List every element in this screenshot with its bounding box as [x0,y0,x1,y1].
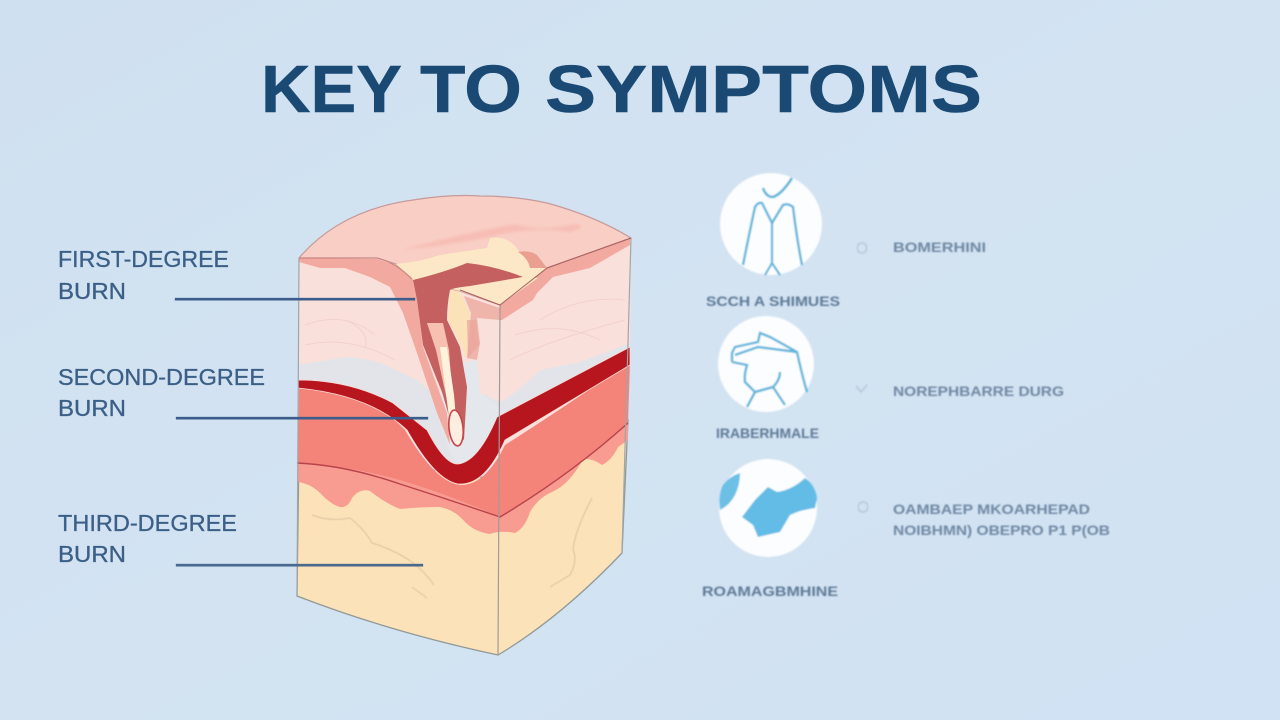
label: first-degree burn: FIRST-DEGREE [58,246,229,272]
epidermis rim left [299,258,450,445]
symptom text: first: BOMERHINI [893,239,986,255]
title: KEY [261,52,402,127]
icon: torso outline [720,173,822,275]
wound cream strip [448,290,470,360]
icon: bandaged head [718,316,814,412]
left rim line [299,258,412,279]
front vertical edge [498,305,500,655]
skin cross-section diagram [297,196,631,655]
title: TO [420,52,522,127]
pale pink dermis [477,245,631,402]
bullet: third symptom [858,502,868,512]
wound dark tissue [413,263,523,440]
wound pink flap [464,296,500,360]
top face highlight [400,224,581,250]
fat layer veins [312,498,592,598]
symptom text: second: NOREPHBARRE DURG [893,383,1064,399]
icon caption: first symptom: SCCH A SHIMUES [706,293,840,309]
grey gap inside wound [437,360,500,463]
symptom text: third: NOIBHMN) OBEPRO P1 P(OB [893,522,1110,538]
wound flap shade [467,320,479,358]
symptom text: third [893,501,1110,538]
label: second-degree burn: SECOND-DEGREE [58,364,265,390]
label: first-degree burn [58,246,415,304]
lighter salmon layer below line [298,415,628,534]
wound crater cream [396,238,547,305]
label: second-degree burn: BURN [58,395,126,421]
dark red band [298,347,630,484]
wound cream lobe [460,277,538,305]
wound crater pink rim [518,251,547,268]
icon caption: third symptom: ROAMAGBMHINE [702,583,838,599]
label: second-degree burn [58,364,428,421]
fat layer [297,420,628,655]
salmon dermis layer [298,362,630,517]
label: third-degree burn [58,510,423,567]
label: third-degree burn: THIRD-DEGREE [58,510,237,536]
bullet: first symptom [857,243,867,253]
label: first-degree burn: BURN [58,278,126,304]
right vertical edge [622,238,631,553]
title [261,52,982,127]
dark red layer line [297,423,628,517]
icon: blue damaged skin [719,459,817,557]
pale grey layer [298,343,630,465]
title: SYMPTOMS [545,52,982,127]
bullet: second symptom check [856,385,867,392]
label: third-degree burn: BURN [58,541,126,567]
wound white core [440,347,457,430]
front corner top line [460,238,631,305]
left vertical edge [297,258,299,596]
wound tip [447,409,465,447]
dermis texture [305,299,625,360]
pale silhouette of upper skin [299,196,631,470]
top face of skin [299,196,631,305]
epidermis rim right [500,238,630,320]
wound inner shaft [427,323,455,430]
symptom text: third: OAMBAEP MKOARHEPAD [893,501,1090,517]
icon caption: second symptom: IRABERHMALE [716,425,819,441]
